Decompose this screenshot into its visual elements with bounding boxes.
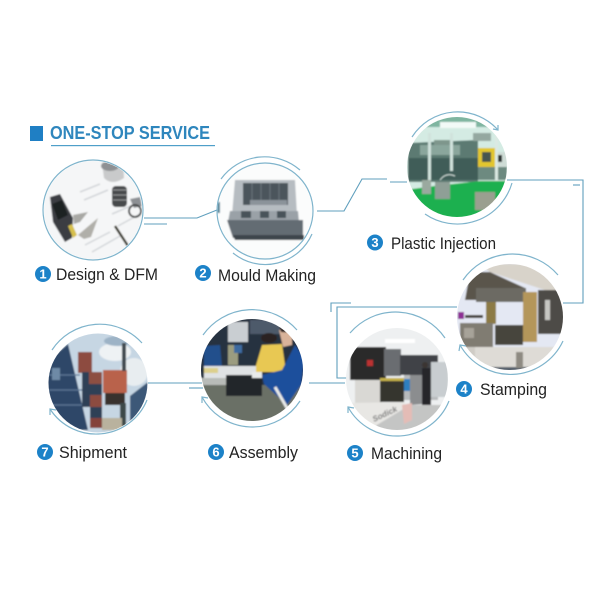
label 6: assembly: 6 (212, 444, 220, 460)
step 5: machining photo: Sodick (371, 404, 399, 424)
label 2: mould making: 2 (199, 266, 207, 280)
connector lines between steps (144, 179, 583, 388)
ring 3 (412, 112, 498, 137)
label 7: shipment: 7 (41, 444, 49, 460)
label 4: stamping: 4 (460, 382, 468, 396)
label 3: plastic injection: Plastic Injection (391, 234, 496, 253)
title: one-stop service: ONE-STOP SERVICE (50, 123, 210, 143)
ring 6 (203, 310, 297, 335)
step 5: machining photo (345, 312, 450, 436)
label 1: design and DFM: 1 (39, 266, 47, 282)
step 4: stamping photo (455, 254, 567, 374)
label 5: machining: Machining (371, 444, 442, 463)
label 6: assembly: Assembly (229, 443, 298, 462)
label 5: machining (347, 444, 442, 463)
step 6: assembly photo (199, 310, 305, 427)
label 3: plastic injection: 3 (371, 235, 379, 250)
step 7: shipment photo (46, 324, 150, 436)
label 5: machining: 5 (351, 446, 359, 460)
step 2: mould making photo (215, 157, 315, 265)
ring 7 (52, 324, 142, 350)
ring 1 (43, 160, 143, 260)
step 3: plastic injection photo (405, 112, 512, 224)
step 1: design and DFM photo (40, 158, 146, 262)
ring 2 (217, 163, 313, 259)
label 7: shipment: Shipment (59, 443, 127, 462)
ring 5 (350, 312, 445, 338)
label 4: stamping: Stamping (480, 380, 547, 399)
label 4: stamping (456, 380, 547, 399)
ring 4 (463, 254, 558, 280)
label 2: mould making: Mould Making (218, 266, 316, 285)
label 1: design and DFM: Design & DFM (56, 265, 158, 284)
